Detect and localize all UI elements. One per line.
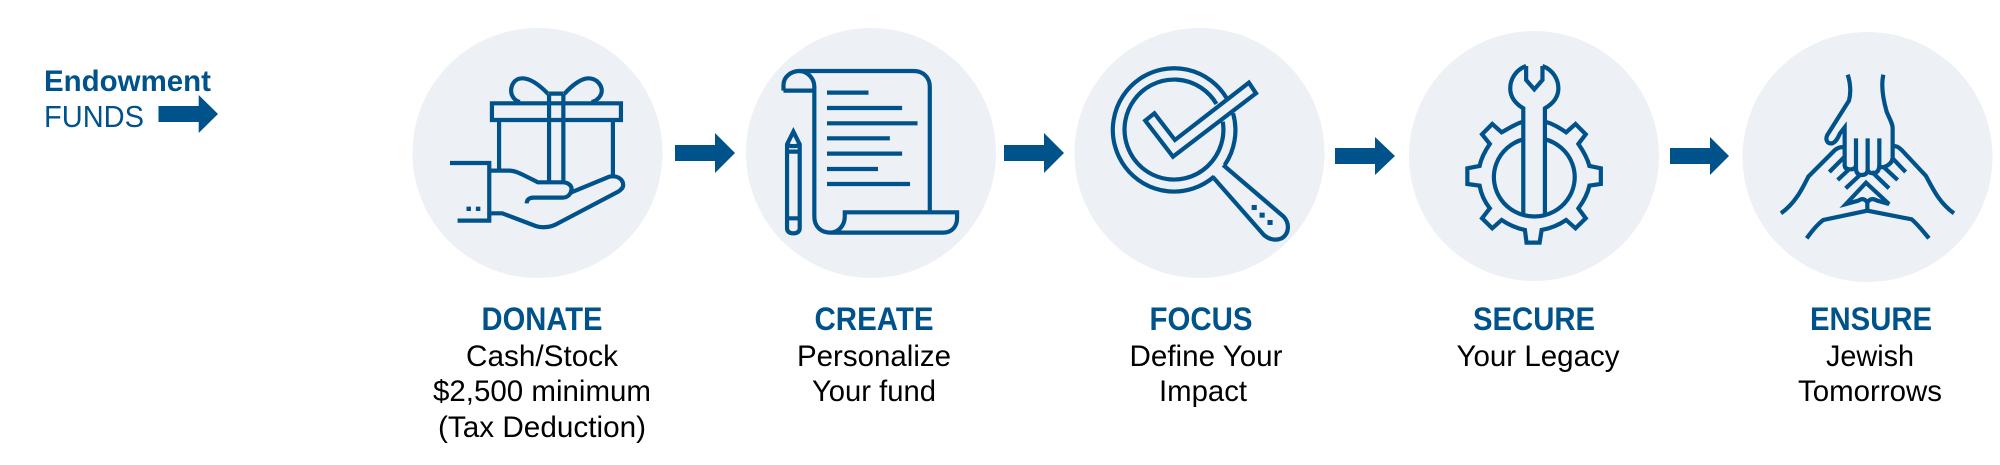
icon: magnifier with checkmark — [1113, 68, 1288, 240]
circle background — [1409, 31, 1659, 281]
description — [1798, 340, 1942, 408]
description: (Tax Deduction) — [438, 411, 646, 444]
description: Impact — [1159, 375, 1248, 408]
circle background — [1742, 32, 1992, 282]
arrow: create to focus — [1004, 133, 1064, 173]
arrow: secure to ensure — [1670, 137, 1729, 175]
circle background — [1074, 28, 1324, 278]
heading: DONATE — [482, 301, 602, 337]
icon: wrench and gear — [1467, 66, 1601, 243]
heading: CREATE — [814, 301, 934, 337]
icon: scroll and pencil — [783, 71, 957, 233]
heading: ENSURE — [1810, 301, 1932, 337]
panel: secure — [1409, 31, 1659, 373]
arrow: donate to create — [675, 133, 735, 173]
subheading: funds: FUNDS — [44, 100, 144, 134]
circle background — [412, 28, 662, 278]
arrow: focus to secure — [1335, 137, 1395, 175]
heading: endowment: Endowment — [44, 65, 211, 98]
description: Personalize — [797, 340, 951, 373]
description — [797, 340, 951, 408]
icon: gift in hand — [450, 78, 623, 227]
panel: create — [746, 28, 996, 408]
description: Define Your — [1130, 340, 1282, 373]
heading: SECURE — [1473, 301, 1595, 337]
heading: FOCUS — [1150, 301, 1252, 337]
arrow: funds to donate — [158, 95, 218, 133]
panel: ensure — [1742, 32, 1992, 408]
description: $2,500 minimum — [433, 375, 651, 408]
description: Jewish — [1826, 340, 1914, 373]
description: Cash/Stock — [466, 340, 619, 373]
panel: focus — [1074, 28, 1324, 408]
description: Your Legacy — [1456, 340, 1620, 373]
description: Your fund — [812, 375, 936, 408]
title: endowment funds — [44, 65, 218, 134]
description — [1130, 340, 1282, 408]
description — [433, 340, 651, 444]
circle background — [746, 28, 996, 278]
panel: donate — [412, 28, 662, 444]
description: Tomorrows — [1798, 375, 1942, 408]
icon: joined hands — [1781, 75, 1954, 238]
